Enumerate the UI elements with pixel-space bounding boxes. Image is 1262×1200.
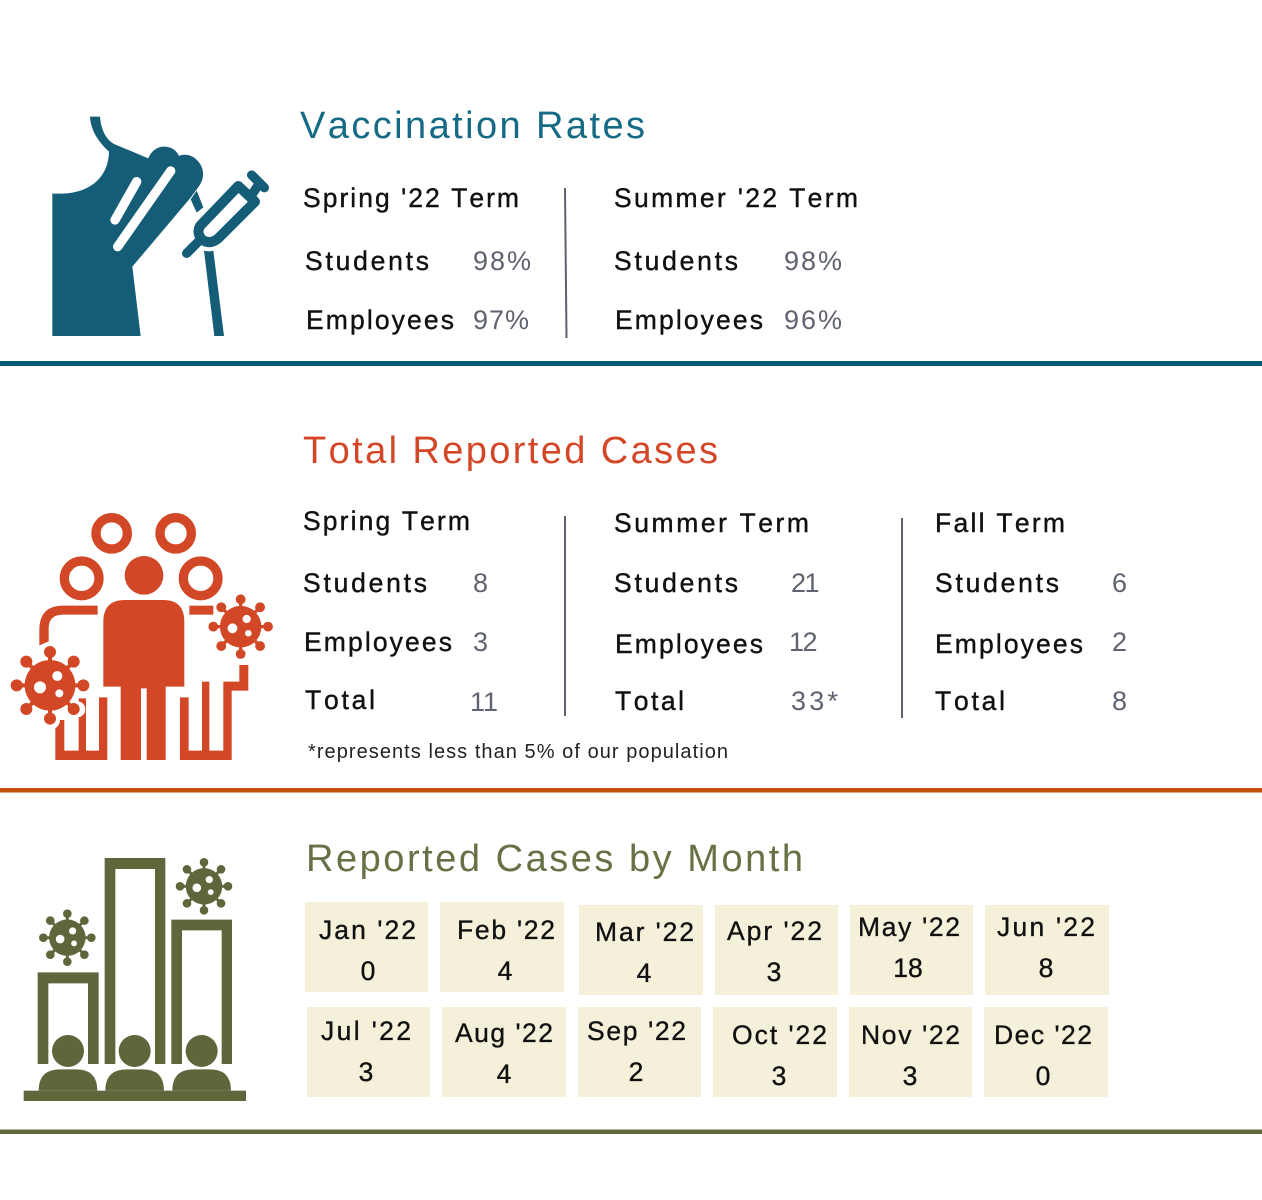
heading: reported cases by month: Reported Cases by Month bbox=[306, 838, 803, 880]
summer term column: 12 bbox=[789, 627, 817, 657]
cell: Apr 22 bbox=[715, 905, 838, 995]
cell: Sep 22: 2 bbox=[629, 1057, 643, 1087]
cell: May 22 bbox=[850, 905, 973, 995]
cell: Oct 22: 3 bbox=[772, 1061, 786, 1091]
summer term column: 33* bbox=[791, 686, 838, 716]
panel: vaccination rates bbox=[52, 105, 858, 338]
cell: Aug 22: Aug '22 bbox=[455, 1018, 553, 1048]
fall term column: Fall Term bbox=[935, 508, 1065, 538]
cell: Jun 22: Jun '22 bbox=[997, 912, 1095, 942]
summer 22 vaccination column: Students bbox=[614, 246, 738, 276]
cell: Feb 22: Feb '22 bbox=[457, 915, 555, 945]
fall term column: 2 bbox=[1112, 627, 1127, 657]
spring term column: Employees bbox=[304, 627, 452, 657]
icon: arm receiving vaccine syringe bbox=[52, 117, 264, 336]
summer 22 vaccination column: 96% bbox=[784, 305, 842, 335]
spring 22 vaccination column bbox=[303, 183, 531, 335]
cell: Feb 22 bbox=[440, 902, 564, 992]
cell: Apr 22: Apr '22 bbox=[727, 916, 822, 946]
cell: Oct 22 bbox=[713, 1007, 837, 1097]
cell: Dec 22: 0 bbox=[1036, 1061, 1050, 1091]
spring 22 vaccination column: Employees bbox=[306, 305, 454, 335]
summer 22 vaccination column bbox=[614, 183, 858, 335]
cell: Jul 22: 3 bbox=[359, 1057, 373, 1087]
spring term column: 8 bbox=[473, 568, 488, 598]
summer 22 vaccination column: 98% bbox=[784, 246, 842, 276]
summer term column: 21 bbox=[791, 568, 819, 598]
fall term column: Students bbox=[935, 568, 1059, 598]
cell: Mar 22 bbox=[579, 905, 703, 995]
spring term column: 11 bbox=[470, 687, 497, 717]
cell: Jun 22: 8 bbox=[1039, 953, 1053, 983]
heading: vaccination rates: Vaccination Rates bbox=[300, 105, 645, 147]
cell: Feb 22: 4 bbox=[498, 956, 512, 986]
spring term column: Students bbox=[303, 568, 427, 598]
spring term column: Spring Term bbox=[303, 506, 470, 536]
cell: Aug 22: 4 bbox=[497, 1059, 511, 1089]
cell: May 22: May '22 bbox=[858, 912, 960, 942]
cell: Nov 22 bbox=[849, 1007, 972, 1097]
cell: Dec 22: Dec '22 bbox=[994, 1020, 1092, 1050]
fall term column: 6 bbox=[1112, 568, 1127, 598]
spring term column: 3 bbox=[473, 627, 488, 657]
summer 22 vaccination column: Employees bbox=[615, 305, 763, 335]
summer term column: Total bbox=[615, 686, 684, 716]
spring 22 vaccination column: 98% bbox=[473, 246, 531, 276]
cell: Apr 22: 3 bbox=[767, 957, 781, 987]
heading: total reported cases: Total Reported Cases bbox=[303, 430, 718, 472]
fall term column bbox=[935, 508, 1127, 716]
cell: Nov 22: Nov '22 bbox=[861, 1020, 960, 1050]
summer term column: Employees bbox=[615, 629, 763, 659]
cell: Mar 22: Mar '22 bbox=[595, 917, 694, 947]
cell: Aug 22 bbox=[442, 1007, 566, 1097]
cell: Sep 22 bbox=[578, 1007, 701, 1097]
summer term column: Students bbox=[614, 568, 738, 598]
fall term column: Employees bbox=[935, 629, 1083, 659]
cell: Jan 22: Jan '22 bbox=[319, 915, 416, 945]
spring term column: Total bbox=[305, 685, 375, 715]
cell: Jul 22: Jul '22 bbox=[321, 1016, 411, 1046]
cell: Oct 22: Oct '22 bbox=[732, 1020, 827, 1050]
fall term column: Total bbox=[935, 686, 1005, 716]
summer term column bbox=[614, 508, 838, 716]
cell: Mar 22: 4 bbox=[637, 958, 651, 988]
panel: total reported cases bbox=[11, 430, 1127, 763]
spring term column bbox=[303, 506, 497, 717]
cell: Jun 22 bbox=[985, 905, 1109, 995]
cell: Dec 22 bbox=[984, 1007, 1108, 1097]
summer 22 vaccination column: Summer '22 Term bbox=[614, 183, 858, 213]
icon: bar chart with people and virus bbox=[24, 858, 246, 1101]
cell: Sep 22: Sep '22 bbox=[587, 1016, 686, 1046]
footnote: *represents less than 5% of our population bbox=[308, 741, 728, 763]
cell: Jul 22 bbox=[307, 1007, 430, 1097]
summer term column: Summer Term bbox=[614, 508, 809, 538]
cell: Nov 22: 3 bbox=[903, 1061, 917, 1091]
spring 22 vaccination column: Students bbox=[305, 246, 429, 276]
cell: May 22: 18 bbox=[893, 953, 923, 983]
fall term column: 8 bbox=[1112, 686, 1127, 716]
spring 22 vaccination column: Spring '22 Term bbox=[303, 183, 519, 213]
panel: reported cases by month bbox=[24, 838, 1109, 1101]
cell: Jan 22 bbox=[305, 902, 428, 992]
cell: Jan 22: 0 bbox=[361, 956, 375, 986]
icon: group of people with virus bbox=[11, 518, 273, 760]
spring 22 vaccination column: 97% bbox=[473, 305, 529, 335]
